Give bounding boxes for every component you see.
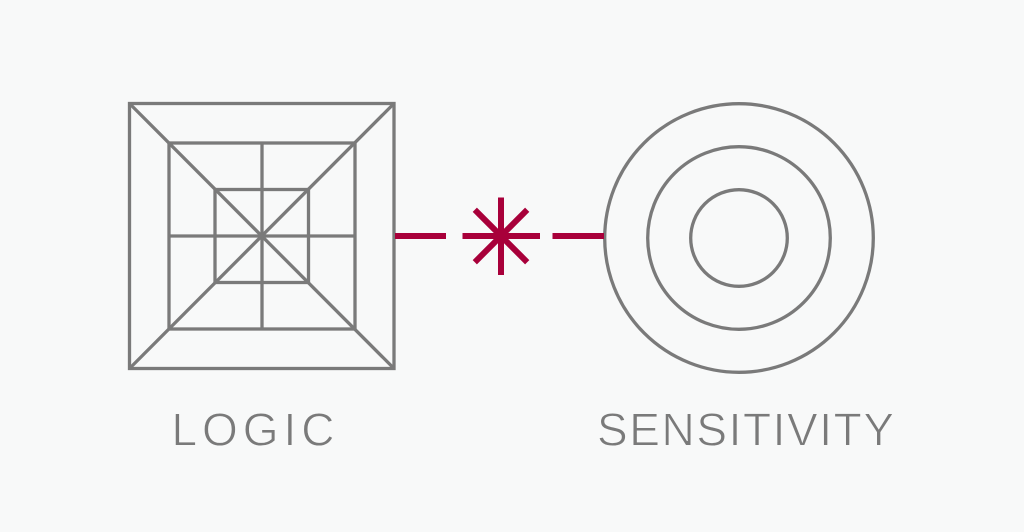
- label: sensitivity: SENSITIVITY: [597, 404, 894, 456]
- icon: sensitivity concentric circles: [605, 104, 873, 372]
- connector: left dash: [395, 233, 446, 239]
- connector: right dash: [552, 233, 604, 239]
- icon: logic square pyramid: [130, 104, 394, 368]
- label: logic: LOGIC: [172, 404, 334, 456]
- icon: red asterisk: [462, 198, 540, 275]
